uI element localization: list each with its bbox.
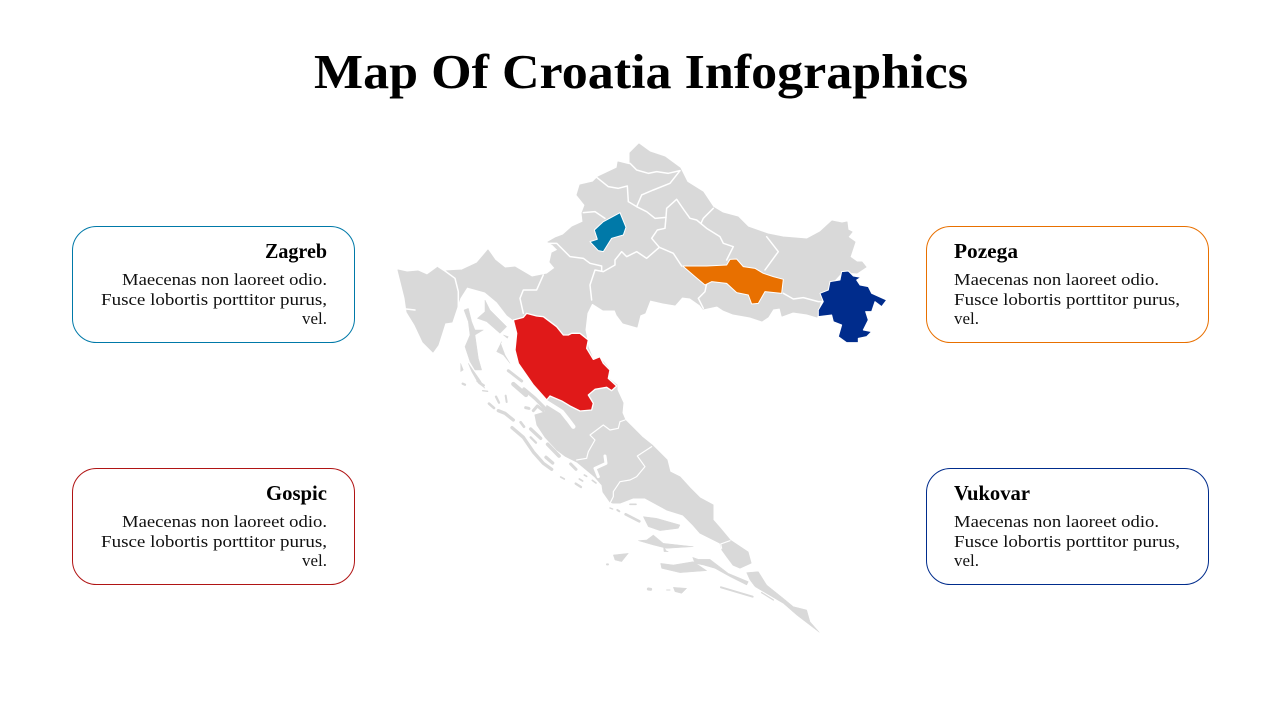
county borders north <box>548 163 733 300</box>
text: Vukovar description: Fusce lobortis porttitor purus, <box>954 532 1180 551</box>
text: Gospic description <box>101 512 327 570</box>
heading: Pozega: Pozega <box>954 239 1018 263</box>
island of Vis <box>613 553 628 562</box>
island of Hvar <box>638 535 693 548</box>
text: Vukovar description: vel. <box>954 551 979 570</box>
panel: Pozega <box>926 226 1208 342</box>
text: Pozega description: Fusce lobortis porttitor purus, <box>954 290 1180 309</box>
text: Gospic description: Maecenas non laoreet odio. <box>122 512 327 531</box>
panel: Vukovar <box>926 468 1208 584</box>
islands of Kvarner <box>461 300 510 388</box>
text: Gospic description: Fusce lobortis porttitor purus, <box>101 532 327 551</box>
text: Zagreb description: Fusce lobortis porttitor purus, <box>101 290 327 309</box>
title: Map Of Croatia Infographics <box>314 44 968 99</box>
text: Vukovar description <box>954 512 1180 570</box>
heading: Zagreb: Zagreb <box>265 239 327 263</box>
text: Zagreb description: vel. <box>302 309 327 328</box>
mainland <box>398 144 866 568</box>
panel: Zagreb <box>72 226 354 342</box>
region: Zagreb <box>590 213 626 252</box>
heading: Gospic: Gospic <box>266 481 327 505</box>
county borders south <box>577 420 652 503</box>
text: Gospic description: vel. <box>302 551 327 570</box>
islands of southern Dalmatia and Dubrovnik coast <box>648 545 819 632</box>
sea inlet below Gospic <box>547 402 573 427</box>
text: Zagreb description: Maecenas non laoreet odio. <box>122 270 327 289</box>
islands of northern Dalmatia <box>463 381 693 564</box>
text: Pozega description <box>954 270 1180 328</box>
islands off the Gospic coast <box>508 371 545 411</box>
county borders west <box>406 267 543 313</box>
region: Gospic <box>513 313 617 411</box>
sea inlet near Split <box>595 456 606 477</box>
text: Pozega description: vel. <box>954 309 979 328</box>
text: Vukovar description: Maecenas non laoreet odio. <box>954 512 1159 531</box>
map of Croatia <box>398 144 887 632</box>
island of Brac <box>643 517 680 531</box>
county borders east <box>698 237 823 308</box>
region: Pozega <box>683 259 783 304</box>
region: Vukovar <box>818 271 887 343</box>
text: Zagreb description <box>101 270 327 328</box>
panel: Gospic <box>72 468 354 584</box>
text: Pozega description: Maecenas non laoreet odio. <box>954 270 1159 289</box>
heading: Vukovar: Vukovar <box>954 481 1030 505</box>
